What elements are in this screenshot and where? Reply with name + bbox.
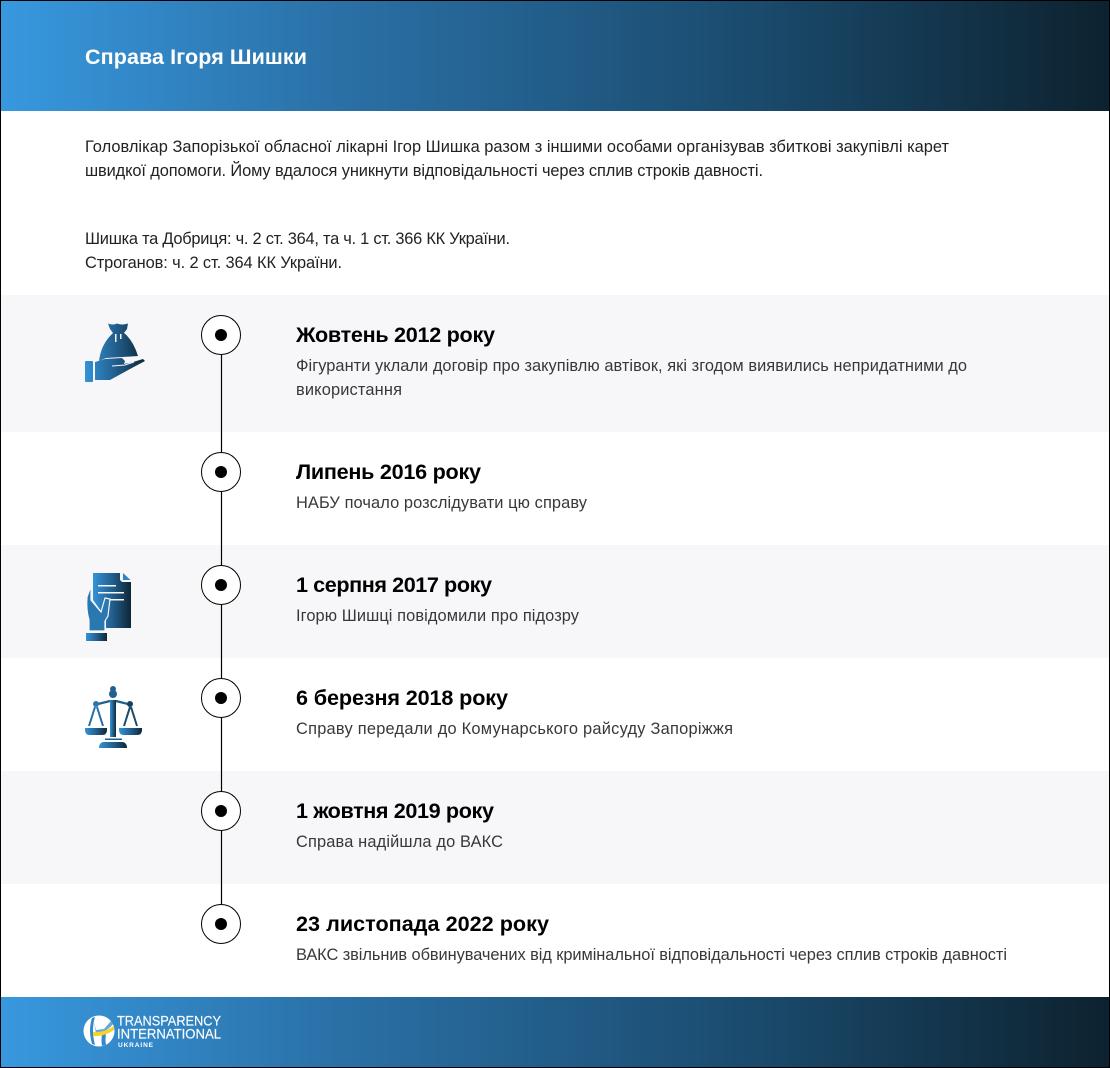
event: 1 October 2019: Справа надійшла до ВАКС	[296, 833, 503, 851]
icon: hand holding document	[86, 573, 131, 641]
logo: Transparency International Ukraine	[84, 1014, 221, 1049]
row background: 1 October 2019	[1, 771, 1109, 884]
timeline marker 4	[202, 678, 240, 718]
event: October 2012: використання	[296, 381, 402, 399]
logo: Transparency International Ukraine: INTERNATIONAL	[117, 1026, 221, 1042]
event: 6 March 2018	[296, 685, 733, 738]
event: October 2012	[295, 322, 967, 399]
intro paragraph	[85, 138, 949, 180]
event: July 2016	[296, 459, 588, 512]
event: October 2012: Фігуранти уклали договір про закупівлю автівок, які згодом виявились непридатними до	[296, 357, 967, 375]
event: 1 August 2017	[296, 572, 580, 625]
title: Справа Ігоря Шишки	[85, 45, 307, 69]
legal articles	[85, 230, 510, 272]
timeline marker 2	[202, 452, 240, 492]
event: October 2012: Жовтень 2012 року	[295, 322, 495, 347]
intro paragraph: швидкої допомоги. Йому вдалося уникнути відповідальності через сплив строків давності.	[85, 161, 763, 180]
timeline marker 6	[202, 904, 240, 944]
event: July 2016: Липень 2016 року	[296, 459, 481, 484]
event: 1 October 2019	[296, 798, 503, 851]
timeline line	[220, 335, 222, 923]
event: 6 March 2018: Справу передали до Комунарського райсуду Запоріжжя	[296, 720, 733, 738]
intro paragraph: Головлікар Запорізької обласної лікарні Ігор Шишка разом з іншими особами організував збиткові закупівлі карет	[85, 138, 949, 156]
event: 1 August 2017: Ігорю Шишці повідомили про підозру	[296, 607, 580, 625]
event: 1 August 2017: 1 серпня 2017 року	[296, 572, 492, 597]
timeline marker 3	[202, 566, 240, 604]
event: 6 March 2018: 6 березня 2018 року	[296, 685, 508, 710]
row background: October 2012	[1, 295, 1109, 432]
timeline marker 5	[202, 792, 240, 830]
logo: Transparency International Ukraine: TRANSPARENCY	[117, 1014, 221, 1028]
legal articles: Строганов: ч. 2 ст. 364 КК України.	[85, 254, 342, 272]
header band	[1, 1, 1109, 111]
icon: money bag on hand	[85, 324, 145, 382]
event: 23 November 2022: ВАКС звільнив обвинувачених від кримінальної відповідальності через сплив строків давності	[296, 946, 1007, 964]
event: 23 November 2022: 23 листопада 2022 року	[296, 911, 549, 936]
row background: 1 August 2017	[1, 545, 1109, 658]
event: 1 October 2019: 1 жовтня 2019 року	[296, 798, 494, 823]
logo: Transparency International Ukraine: UKRAINE	[118, 1042, 154, 1049]
timeline marker 1	[202, 316, 240, 354]
icon: scales of justice	[85, 686, 142, 748]
event: 23 November 2022	[296, 911, 1007, 964]
footer band	[1, 997, 1109, 1067]
event: July 2016: НАБУ почало розслідувати цю справу	[296, 494, 588, 512]
legal articles: Шишка та Добриця: ч. 2 ст. 364, та ч. 1 ст. 366 КК України.	[85, 230, 510, 248]
